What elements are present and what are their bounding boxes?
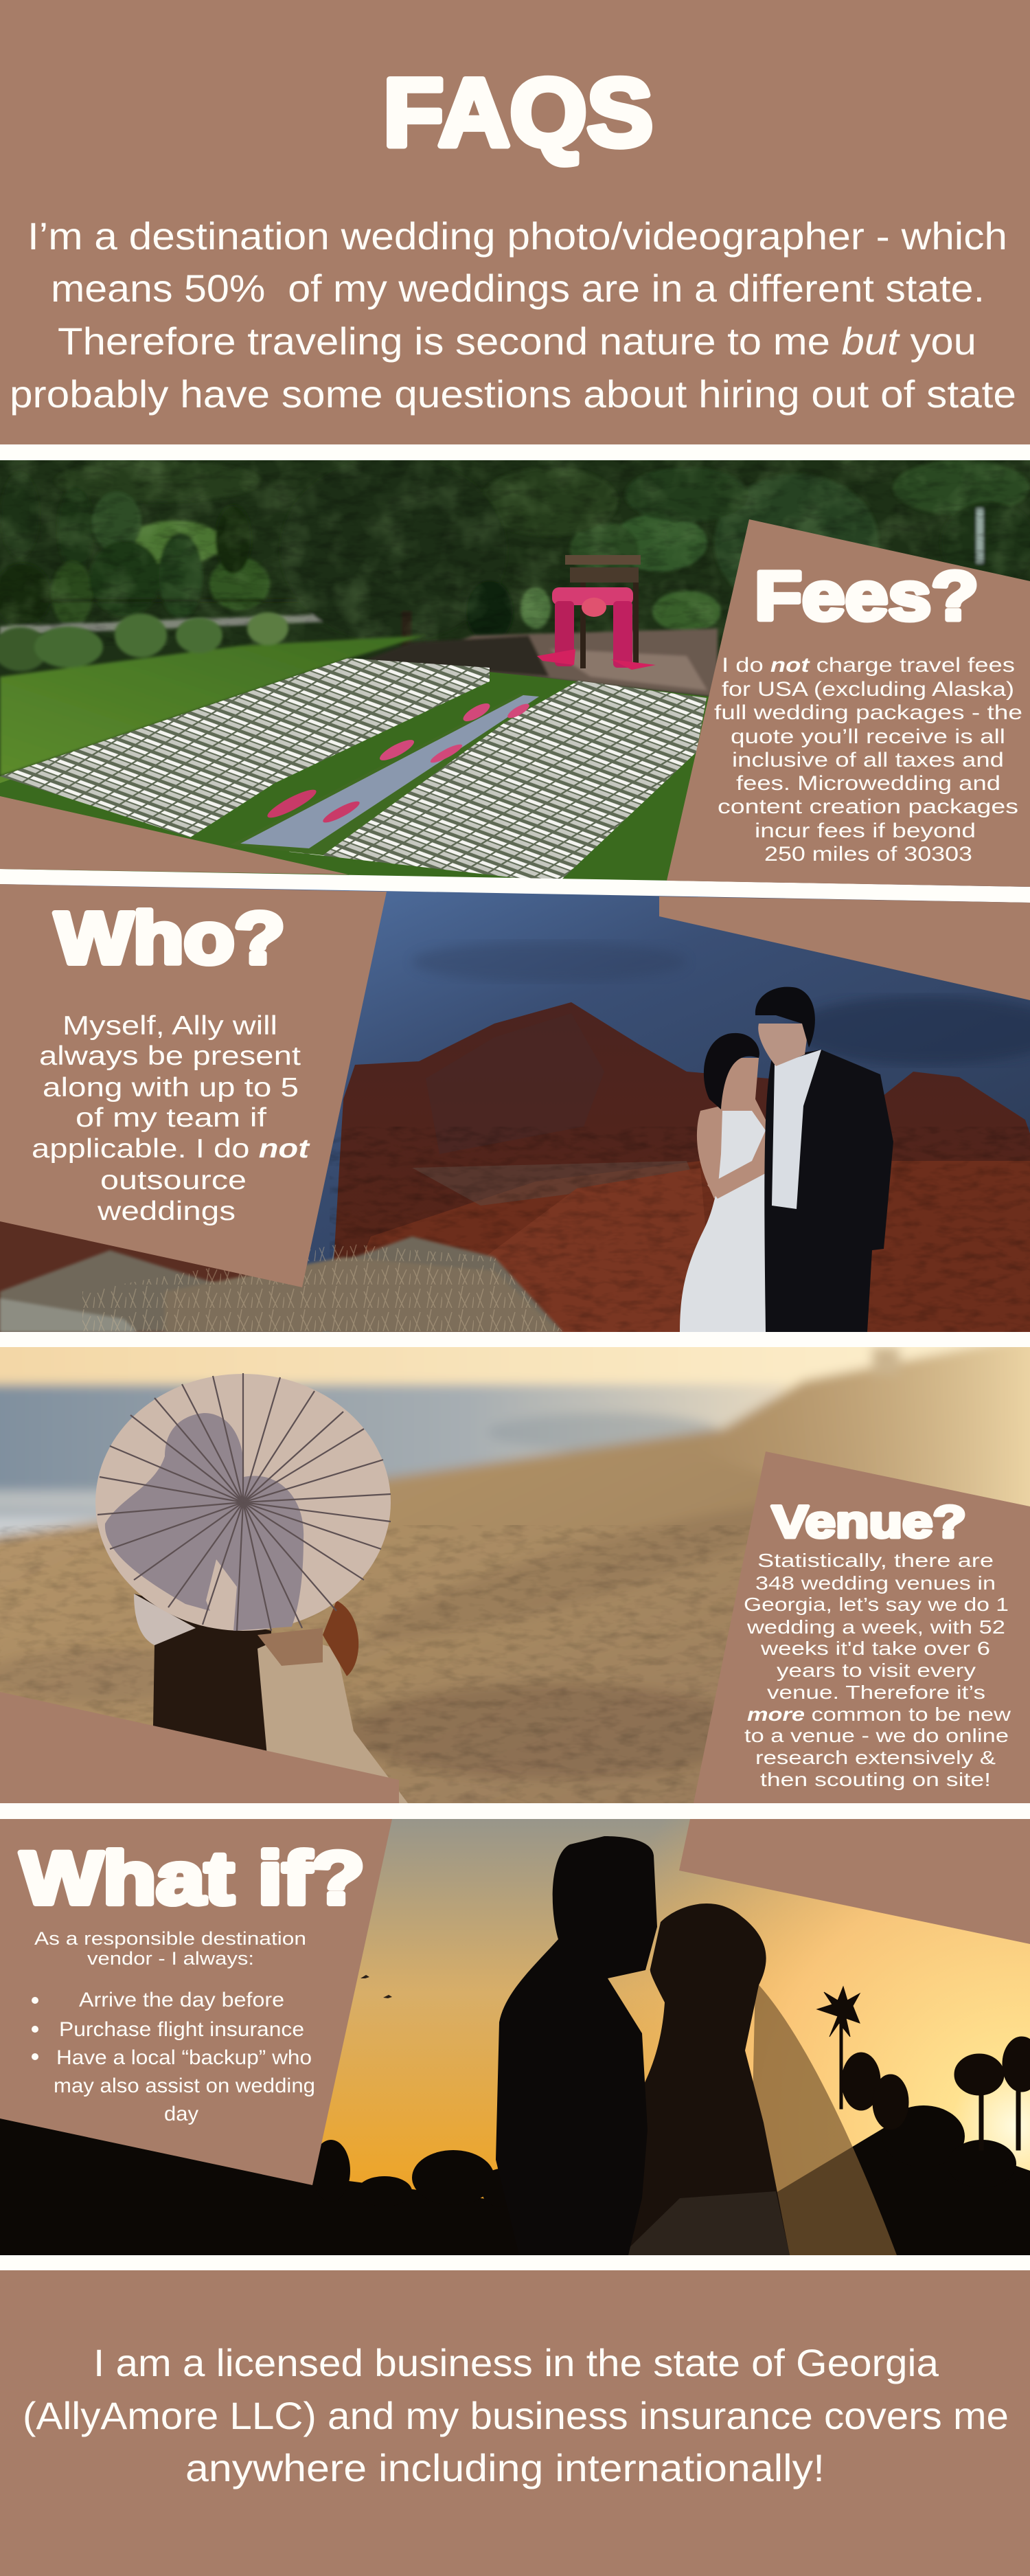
accent: lower left wedge, photo three [0, 1692, 399, 1803]
panel: what if [0, 1819, 392, 2185]
bullet list: Arrive the day before [79, 1989, 284, 2011]
body text: always be present [39, 1041, 301, 1071]
panel background [694, 1451, 1030, 1803]
body text: outsource [100, 1166, 247, 1195]
accent: lower left wedge, photo one [0, 796, 348, 874]
closing text: I am a licensed business in the state of Georgia [93, 2341, 939, 2384]
body text: Statistically, there are [757, 1550, 994, 1571]
body text [744, 1550, 1011, 1790]
body text: years to visit every [777, 1660, 976, 1681]
bullet list [32, 1989, 315, 2125]
treeline and ground [0, 2102, 1030, 2255]
heading: What if? [21, 1836, 365, 1919]
red rock mountains [330, 1002, 1030, 1332]
body text: applicable. I do not [32, 1134, 310, 1164]
accent: upper right wedge, photo two [659, 896, 1030, 1000]
body text [714, 654, 1022, 866]
body text: fees. Microwedding and [736, 772, 1000, 795]
panel: venue [694, 1451, 1030, 1803]
intro text: Therefore traveling is second nature to me but you [58, 319, 976, 363]
intro text [34, 1928, 306, 1969]
body text: Georgia, let’s say we do 1 [744, 1594, 1009, 1615]
body text: for USA (excluding Alaska) [722, 678, 1014, 701]
body text: research extensively & [755, 1747, 996, 1768]
intro text [10, 214, 1016, 416]
heading: Fees? [755, 558, 978, 635]
bullet list: may also assist on wedding [54, 2075, 315, 2097]
body text: then scouting on site! [760, 1769, 991, 1790]
closing text: anywhere including internationally! [185, 2446, 825, 2489]
body text: I do not charge travel fees [722, 654, 1015, 677]
body text: along with up to 5 [43, 1073, 299, 1103]
photo: couple in red rock desert [0, 884, 1030, 1332]
intro text: means 50% of my weddings are in a different state. [51, 267, 985, 310]
panel background [0, 0, 1030, 444]
body text: 348 wedding venues in [755, 1572, 996, 1594]
birds [360, 1975, 392, 1998]
accent: upper right wedge, photo four [679, 1819, 1030, 1944]
body text [32, 1011, 310, 1226]
bullet list: day [164, 2103, 198, 2125]
parasol [95, 1373, 391, 1631]
body text: incur fees if beyond [755, 820, 976, 842]
body text: 250 miles of 30303 [764, 843, 972, 866]
body text: to a venue - we do online [744, 1725, 1009, 1746]
heading: Who? [55, 898, 285, 979]
couple behind parasol [134, 1594, 408, 1803]
beach background [0, 1333, 1030, 1817]
groom [764, 1050, 893, 1332]
intro text: vendor - I always: [87, 1948, 254, 1969]
body text: quote you’ll receive is all [731, 725, 1005, 748]
body text: full wedding packages - the [714, 701, 1022, 724]
panel: who [0, 884, 387, 1287]
body text: weeks it'd take over 6 [760, 1638, 990, 1659]
body text: Myself, Ally will [62, 1011, 277, 1041]
panel background [0, 884, 387, 1287]
closing text [23, 2341, 1009, 2489]
intro text: probably have some questions about hiring out of state [10, 372, 1016, 416]
groom silhouette [496, 1836, 657, 2255]
body text: content creation packages [718, 795, 1018, 818]
white diagonal band [0, 869, 1030, 903]
pergola and floral arch [537, 555, 656, 670]
body text: inclusive of all taxes and [732, 749, 1004, 771]
heading: Venue? [772, 1496, 966, 1547]
photo: sunset silhouette kiss [0, 1819, 1030, 2255]
couple [680, 987, 893, 1332]
photo: outdoor ceremony aerial [0, 457, 1030, 893]
intro text: As a responsible destination [34, 1928, 306, 1949]
bullet list: Have a local “backup” who [56, 2046, 312, 2069]
ceremony chairs [0, 658, 707, 883]
body text: wedding a week, with 52 [746, 1616, 1005, 1638]
panel background [0, 2270, 1030, 2576]
lawn and hedge [0, 612, 718, 776]
panel: closing note [0, 2270, 1030, 2576]
background trees [0, 457, 1030, 653]
palm trees [817, 1987, 1030, 2150]
panel background [0, 1819, 392, 2185]
intro text: I’m a destination wedding photo/videographer - which [27, 214, 1007, 258]
panel: fees [667, 519, 1030, 887]
body text: of my team if [76, 1103, 266, 1133]
body text: weddings [97, 1197, 236, 1226]
kiss shadow on parasol [105, 1413, 304, 1631]
closing text: (AllyAmore LLC) and my business insurance covers me [23, 2394, 1009, 2437]
body text: more common to be new [747, 1704, 1011, 1725]
bride silhouette [621, 1903, 897, 2255]
title: FAQS [383, 58, 653, 166]
bullet list: Purchase flight insurance [59, 2018, 304, 2041]
bride [697, 1058, 769, 1199]
photo: beach couple with parasol [0, 1333, 1030, 1817]
desert grass [0, 1236, 563, 1332]
body text: venue. Therefore it’s [767, 1682, 985, 1703]
panel: intro header [0, 0, 1030, 444]
panel background [667, 519, 1030, 887]
